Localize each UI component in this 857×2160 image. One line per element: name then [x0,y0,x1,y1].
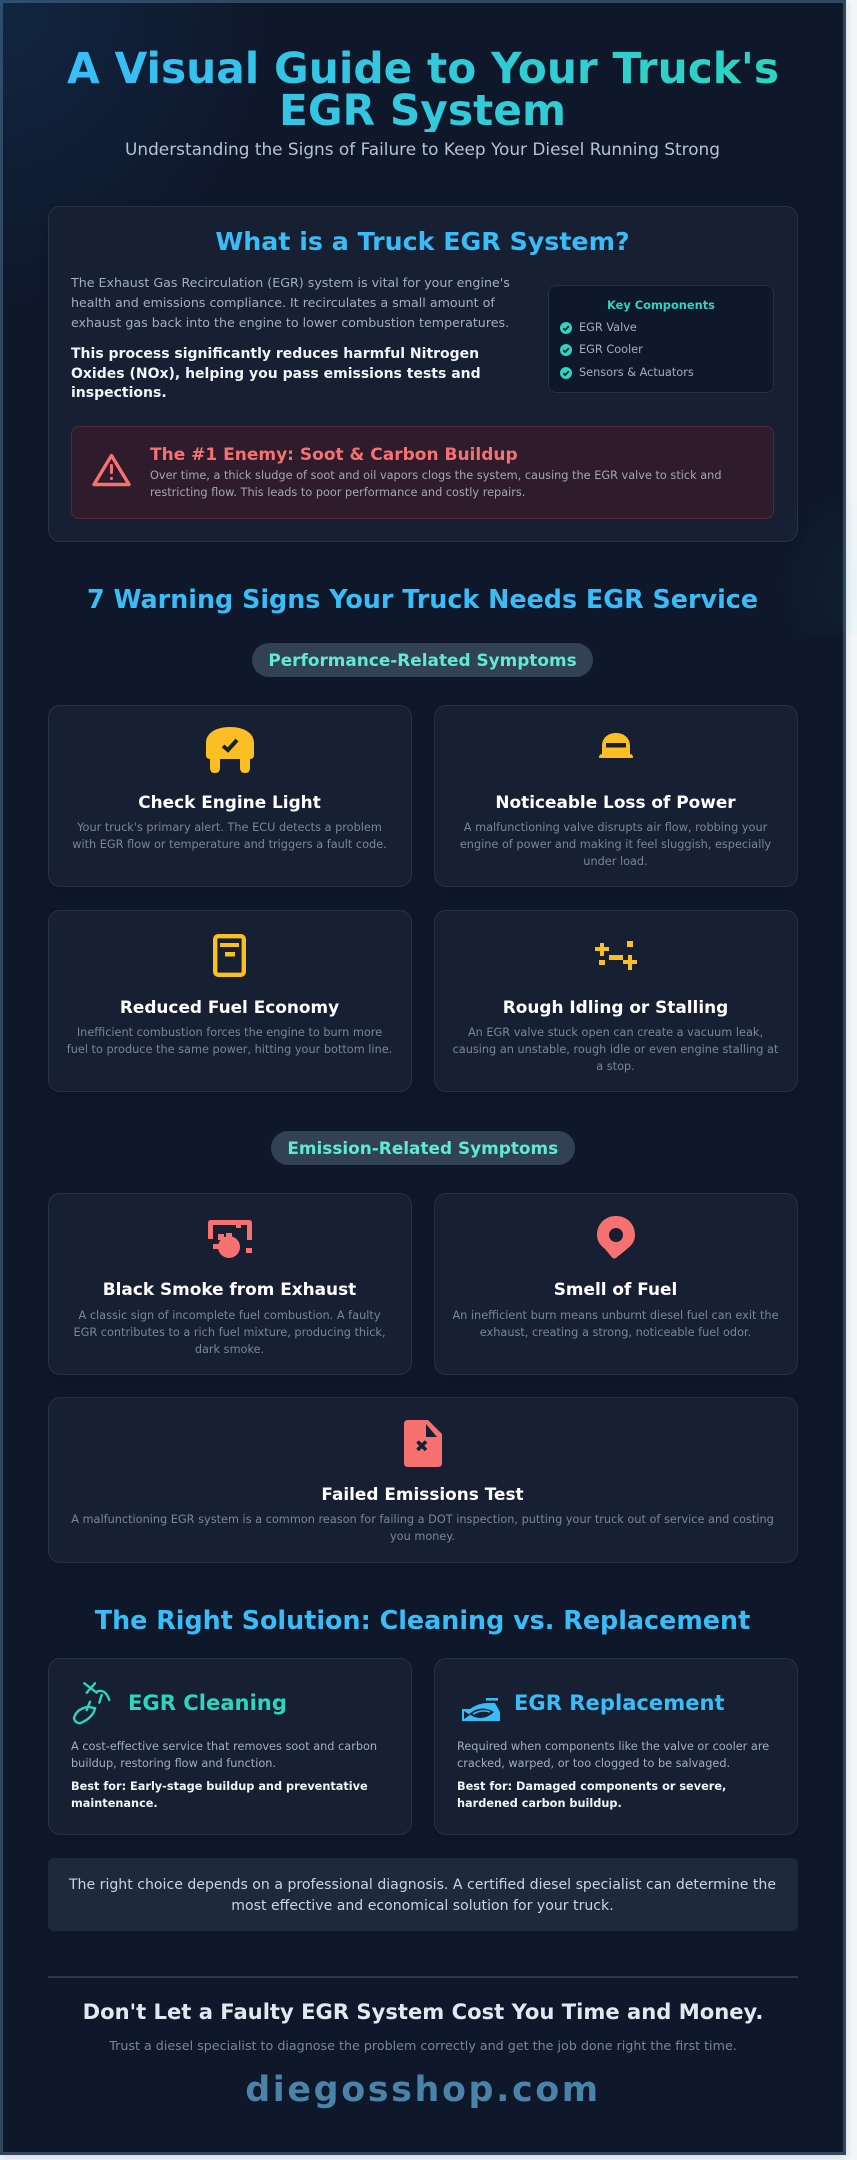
card heading: Smell of Fuel [554,1279,677,1299]
intro text: exhaust gas back into the engine to lower combustion temperatures. [71,315,509,330]
card text: dark smoke. [195,1343,264,1356]
card text: exhaust, creating a strong, noticeable fuel odor. [480,1326,751,1339]
callout: soot and carbon buildup [71,426,774,519]
card text [71,1740,377,1770]
card: EGR cleaning [48,1658,412,1835]
card: EGR replacement [434,1658,798,1835]
background glow: right side [720,470,857,634]
callout text: restricting flow. This leads to poor performance and costly repairs. [150,486,525,499]
card text: A cost-effective service that removes soot and carbon [71,1740,377,1752]
intro text: health and emissions compliance. It recirculates a small amount of [71,295,495,310]
card text [452,1309,779,1339]
best for text [457,1780,726,1810]
note: professional diagnosis [48,1858,798,1931]
card heading: EGR Cleaning [128,1690,287,1715]
icon: fuel gauge [213,934,246,977]
card text: buildup, restoring flow and function. [71,1756,276,1770]
component: Sensors and Actuators: Sensors & Actuators [579,366,694,379]
subtitle: Understanding the Signs of Failure to Keep Your Diesel Running Strong [125,139,720,159]
card heading: Rough Idling or Stalling [503,997,728,1017]
note text [68,1877,776,1914]
card text [72,821,387,851]
card text: Your truck's primary alert. The ECU detects a problem [77,821,382,834]
panel: what is an EGR system [48,206,798,542]
card heading: EGR Replacement [514,1690,725,1715]
brand url: diegosshop.com [245,2070,601,2110]
component: EGR Cooler: EGR Cooler [579,343,643,356]
card text: a stop. [596,1060,635,1073]
closing heading: Don't Let a Faulty EGR System Cost You Time and Money. [83,1999,763,2024]
card text: Required when components like the valve or cooler are [457,1740,769,1752]
best for text: Best for: Damaged components or severe, [457,1780,726,1792]
title [67,48,778,132]
card text [71,1513,774,1543]
card text: Inefficient combustion forces the engine to burn more [77,1026,382,1039]
intro text [70,275,510,330]
card text [457,1740,769,1770]
card text: engine of power and making it feel sluggish, especially [460,838,771,851]
icon: battery plus minus [595,941,637,970]
card heading: Reduced Fuel Economy [120,997,339,1017]
intro text: The Exhaust Gas Recirculation (EGR) system is vital for your engine's [71,275,510,290]
card: black smoke [48,1193,412,1375]
card text [67,1026,392,1056]
key components heading: Key Components [607,298,715,312]
panel heading: What is a Truck EGR System? [215,227,630,256]
card: smell of fuel [434,1193,798,1375]
best for text: maintenance. [71,1796,158,1810]
icon: cleaning wrench [72,1682,110,1724]
card: fuel economy [48,910,412,1092]
card: loss of power [434,705,798,887]
best for text [71,1780,368,1810]
card text: A malfunctioning valve disrupts air flow, robbing your [464,821,767,834]
note text: The right choice depends on a professional diagnosis. A certified diesel specialist can determine the [69,1877,776,1893]
title: EGR System [279,86,566,135]
callout text [150,469,722,499]
card: check engine light [48,705,412,887]
best for text: Best for: Early-stage buildup and preventative [71,1780,368,1792]
icon: file with x [404,1420,442,1467]
card heading: Noticeable Loss of Power [495,792,736,812]
pill: performance symptoms [252,643,593,677]
pill: emission symptoms [270,1131,575,1165]
icon: warning triangle [92,454,131,486]
icon: location pin [597,1216,635,1258]
card: rough idling [434,910,798,1092]
card text: cracked, warped, or too clogged to be salvaged. [457,1756,730,1770]
pill: emission symptoms: Emission-Related Symptoms [287,1138,558,1158]
emphasis text [71,346,481,401]
card text: A malfunctioning EGR system is a common reason for failing a DOT inspection, putting your truck out of service and costing [71,1513,774,1526]
card heading: Black Smoke from Exhaust [103,1279,356,1299]
card text: you money. [390,1530,455,1543]
icon: check engine [206,727,254,773]
callout heading: The #1 Enemy: Soot & Carbon Buildup [150,445,518,465]
card text: fuel to produce the same power, hitting your bottom line. [67,1043,392,1056]
note text: most effective and economical solution for your truck. [231,1898,614,1914]
emphasis text: Oxides (NOx), helping you pass emissions tests and [71,366,481,382]
card text: An inefficient burn means unburnt diesel fuel can exit the [452,1309,779,1322]
component: EGR Valve: EGR Valve [579,321,637,334]
icon: smoke [208,1220,252,1258]
title: A Visual Guide to Your Truck's [67,44,779,93]
icon: power dome [599,733,633,758]
card text: under load. [583,855,648,868]
card text: An EGR valve stuck open can create a vacuum leak, [468,1026,763,1039]
best for text: hardened carbon buildup. [457,1796,622,1810]
card text: causing an unstable, rough idle or even engine stalling at [453,1043,778,1056]
card heading: Check Engine Light [138,792,321,812]
emphasis text: This process significantly reduces harmful Nitrogen [71,346,479,362]
card text [460,821,771,868]
icon: replacement engine [462,1698,500,1721]
card text [453,1026,778,1073]
card: failed emissions test [48,1397,798,1563]
key components box [548,285,774,393]
card text: A classic sign of incomplete fuel combustion. A faulty [78,1309,380,1322]
card text [73,1309,386,1356]
card text: with EGR flow or temperature and triggers a fault code. [72,838,387,851]
card heading: Failed Emissions Test [321,1484,524,1504]
emphasis text: inspections. [71,385,167,401]
callout text: Over time, a thick sludge of soot and oil vapors clogs the system, causing the EGR valve to stick and [150,469,722,482]
closing text: Trust a diesel specialist to diagnose the problem correctly and get the job done right the first time. [109,2038,737,2053]
card text: EGR contributes to a rich fuel mixture, producing thick, [73,1326,386,1339]
heading: the right solution: The Right Solution: Cleaning vs. Replacement [95,1605,750,1635]
pill: performance symptoms: Performance-Related Symptoms [268,650,577,670]
heading: warning signs: 7 Warning Signs Your Truck Needs EGR Service [87,584,758,614]
